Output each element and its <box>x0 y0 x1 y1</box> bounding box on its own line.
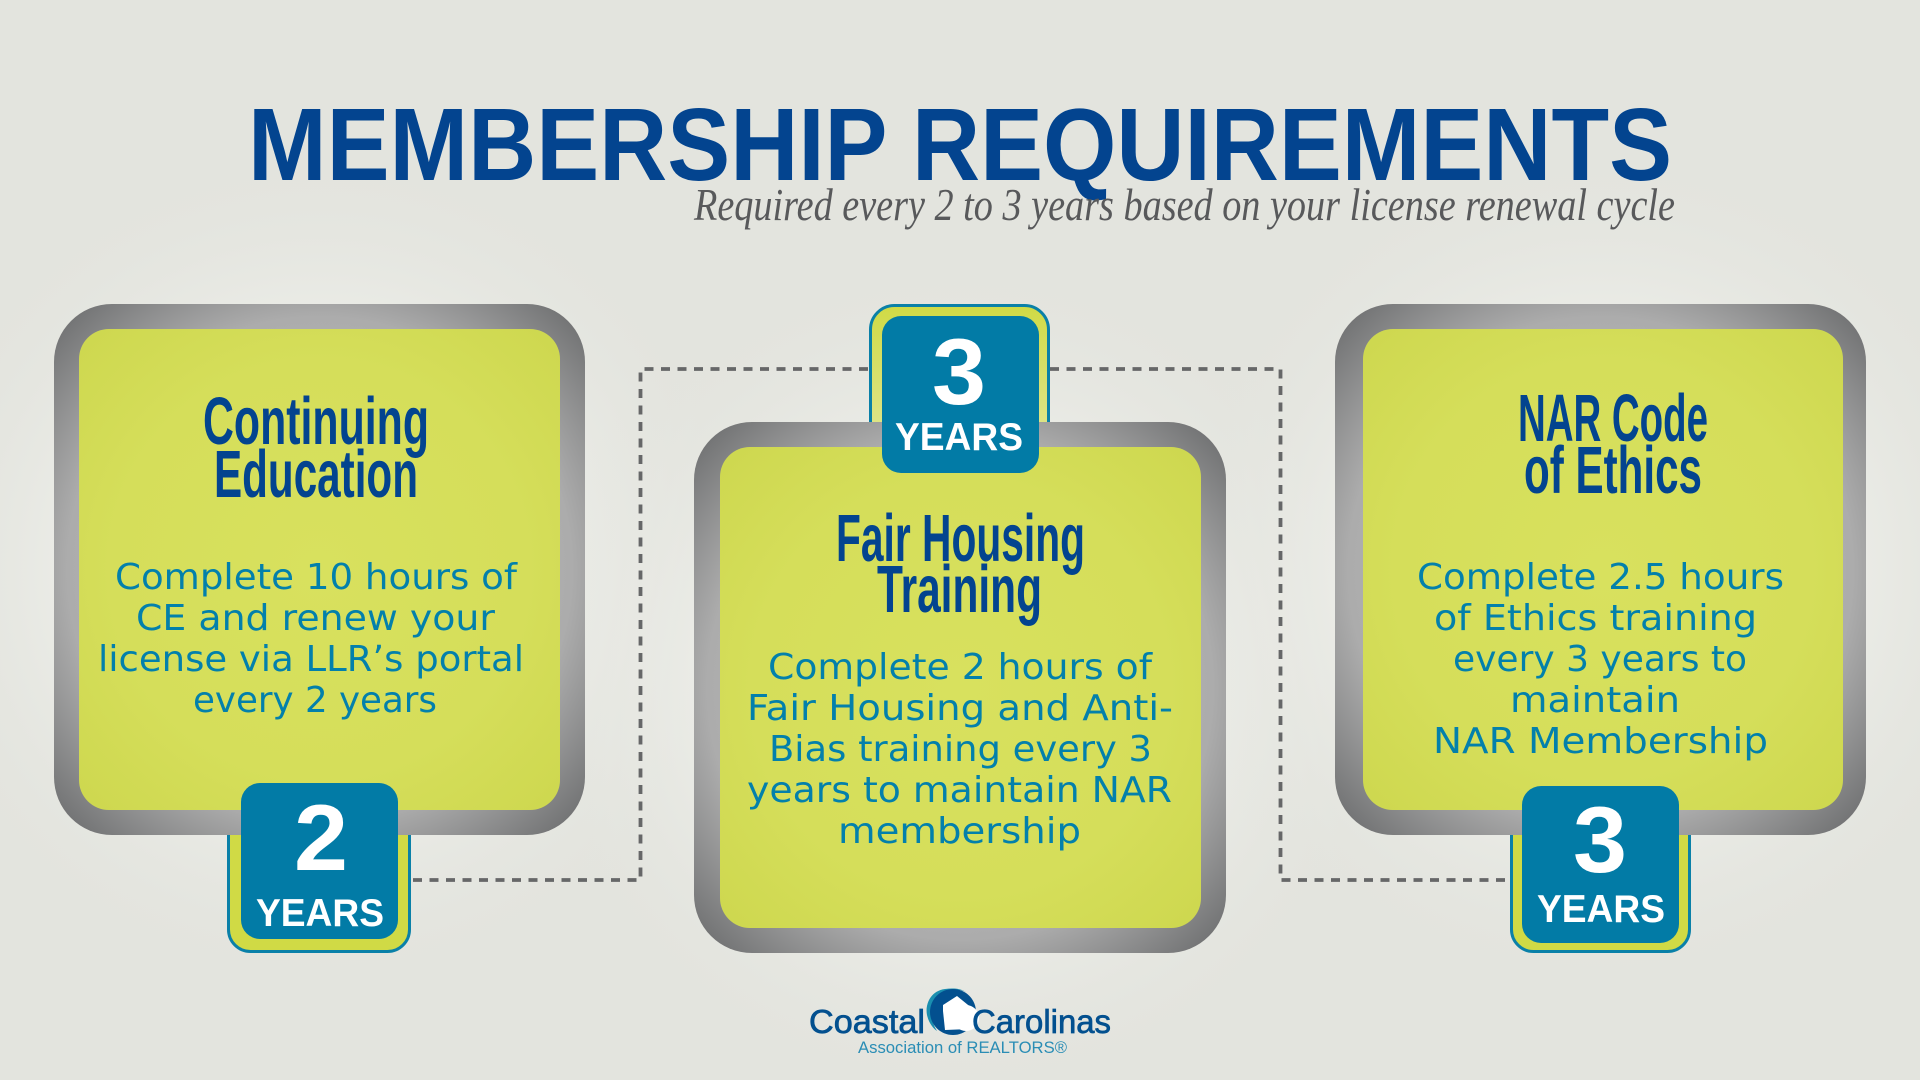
badge: 2 years: YEARS <box>256 892 384 935</box>
body text: CE and renew your <box>136 598 495 639</box>
dashed connector left <box>413 369 869 880</box>
body text <box>1417 557 1784 762</box>
heading: Fair Housing <box>836 501 1085 576</box>
badge: 2 years: 2 <box>294 785 348 890</box>
heading: Training <box>877 552 1042 627</box>
badge: 3 years: YEARS <box>1537 888 1665 931</box>
tab behind right badge <box>1512 770 1690 952</box>
badge: 3 years <box>1522 786 1679 943</box>
body text <box>747 647 1173 852</box>
body text: NAR Membership <box>1433 721 1768 762</box>
body text: Complete 10 hours of <box>115 557 518 598</box>
heading <box>836 501 1085 627</box>
badge: 3 years: YEARS <box>895 416 1023 459</box>
heading: of Ethics <box>1524 433 1702 508</box>
panel: fair housing training <box>694 306 1226 953</box>
frame <box>1335 304 1866 835</box>
subtitle: Required every 2 to 3 years based on your license renewal cycle <box>693 179 1675 230</box>
lime card <box>720 447 1201 928</box>
body text: maintain <box>1510 680 1680 721</box>
body text: Fair Housing and Anti- <box>747 688 1173 729</box>
body text: Complete 2.5 hours <box>1417 557 1784 598</box>
frame <box>694 422 1226 953</box>
lime card <box>79 329 560 810</box>
body text: license via LLR’s portal <box>98 639 524 680</box>
heading: NAR Code <box>1518 381 1708 456</box>
lime card <box>1363 329 1843 810</box>
panel: NAR code of ethics <box>1335 304 1866 952</box>
logo: Coastal Carolinas Association of REALTORS: Association of REALTORS® <box>858 1038 1067 1057</box>
badge: 3 years: 3 <box>1573 787 1627 892</box>
body text: Complete 2 hours of <box>768 647 1153 688</box>
badge: 3 years: 3 <box>932 319 986 424</box>
tab behind left badge <box>228 770 410 952</box>
heading <box>203 384 429 512</box>
panel: continuing education <box>54 304 585 952</box>
logo: Coastal Carolinas Association of REALTORS <box>809 988 1111 1057</box>
badge: 2 years <box>241 783 398 939</box>
body text: years to maintain NAR <box>747 770 1172 811</box>
heading: Continuing <box>203 384 429 459</box>
icon: circle and house <box>927 988 979 1035</box>
body text: every 3 years to <box>1453 639 1747 680</box>
body text: every 2 years <box>193 680 437 721</box>
badge: 3 years <box>882 316 1039 473</box>
logo: Coastal Carolinas Association of REALTORS: Carolinas <box>972 1003 1111 1040</box>
heading <box>1518 381 1708 508</box>
frame <box>54 304 585 835</box>
tab behind middle badge <box>870 306 1048 476</box>
heading: Education <box>214 437 418 512</box>
body text: of Ethics training <box>1434 598 1757 639</box>
body text <box>98 557 524 721</box>
logo: Coastal Carolinas Association of REALTORS: Coastal <box>809 1003 925 1040</box>
dashed connector right <box>1050 369 1510 880</box>
title: MEMBERSHIP REQUIREMENTS <box>248 87 1672 202</box>
body text: Bias training every 3 <box>769 729 1152 770</box>
body text: membership <box>838 811 1081 852</box>
